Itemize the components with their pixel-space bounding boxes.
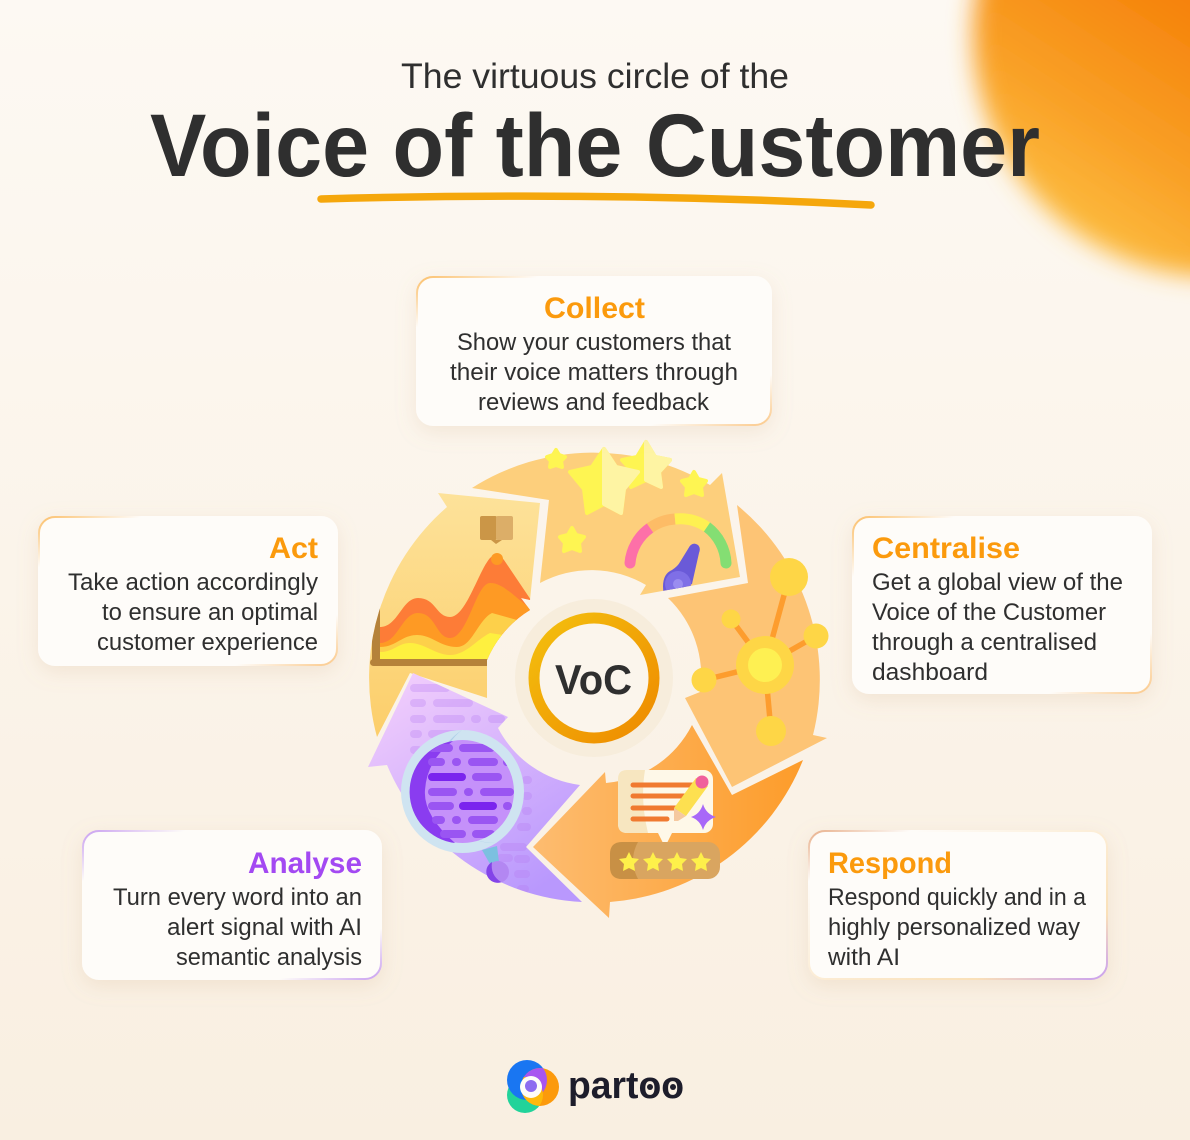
text: centralise description: through a centralised [872, 629, 1097, 656]
panel: act [39, 517, 337, 665]
text: centralise description [872, 569, 1123, 686]
icon: gauge [630, 519, 726, 597]
title [150, 57, 1040, 205]
text: collect description [450, 329, 738, 416]
heading: act: Act [269, 532, 318, 565]
panel: respond [809, 831, 1107, 979]
text: collect description: reviews and feedback [478, 389, 710, 416]
logo: partoo [507, 1060, 684, 1113]
text: respond description: highly personalized way [828, 914, 1080, 941]
text: analyse description: semantic analysis [176, 944, 362, 971]
text: analyse description: alert signal with AI [167, 914, 362, 941]
segment: analyse [368, 673, 582, 902]
panel: analyse [83, 831, 381, 979]
title underline [321, 196, 871, 205]
text: analyse description [113, 884, 362, 971]
icon: partoo mark [507, 1060, 559, 1113]
heading: centralise: Centralise [872, 532, 1020, 565]
heading: analyse: Analyse [248, 847, 362, 880]
text: act description: Take action accordingly [68, 569, 318, 596]
text: act description [68, 569, 318, 656]
text: respond description: with AI [827, 944, 900, 971]
heading: respond: Respond [828, 847, 952, 880]
icon: review note [610, 770, 720, 879]
text: centralise description: dashboard [872, 659, 988, 686]
circular diagram [368, 442, 828, 918]
text: collect description: Show your customers that [457, 329, 731, 356]
icon: stars [547, 442, 706, 551]
text: act description: to ensure an optimal [102, 599, 318, 626]
text: centralise description: Get a global view of the [872, 569, 1123, 596]
VoC centre badge [515, 599, 673, 757]
segment: respond [533, 725, 803, 918]
VoC centre badge: VoC [555, 656, 632, 703]
title line 2: Voice of the Customer [150, 95, 1040, 195]
panel: collect [417, 277, 771, 425]
decorative sun gradient [973, 0, 1190, 277]
title line 1: The virtuous circle of the [401, 57, 789, 96]
text: respond description: Respond quickly and in a [828, 884, 1087, 911]
heading: collect: Collect [544, 292, 645, 325]
text: analyse description: Turn every word into an [113, 884, 362, 911]
text: respond description [827, 884, 1087, 971]
icon: background text pills [410, 684, 532, 893]
logo wordmark: partoo [568, 1065, 684, 1107]
icon: magnifying glass [401, 730, 524, 883]
icon: area chart [370, 516, 535, 666]
segment: centralise [668, 505, 828, 787]
icon: network [692, 558, 828, 746]
panel: centralise [853, 517, 1151, 693]
segment: act [369, 493, 540, 737]
text: act description: customer experience [97, 629, 318, 656]
text: centralise description: Voice of the Customer [872, 599, 1106, 626]
segment: collect [472, 442, 740, 597]
text: collect description: their voice matters through [450, 359, 738, 386]
